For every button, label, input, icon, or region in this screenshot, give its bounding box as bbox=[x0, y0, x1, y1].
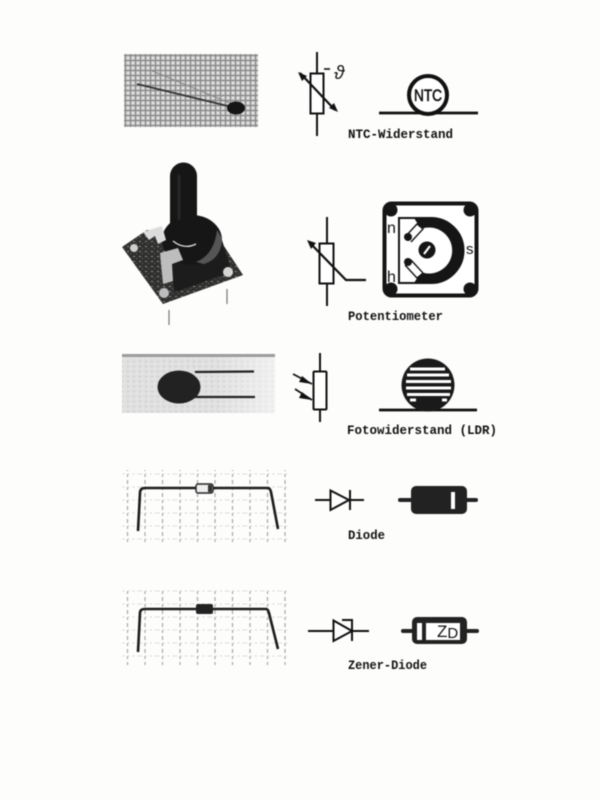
photo: diode on grid bbox=[122, 470, 290, 543]
icon: LDR package bbox=[379, 358, 477, 412]
photo: Zener diode on grid bbox=[122, 590, 290, 665]
panel: potentiometer bbox=[122, 162, 476, 325]
panel: diode bbox=[122, 470, 476, 543]
symbol: potentiometer circuit symbol bbox=[307, 217, 366, 306]
icon: potentiometer package bbox=[384, 204, 476, 296]
symbol: diode circuit symbol bbox=[315, 490, 364, 510]
icon: Zener diode package bbox=[403, 617, 477, 644]
symbol: Zener diode circuit symbol bbox=[308, 620, 369, 641]
icon: NTC package bbox=[379, 76, 478, 114]
symbol: NTC circuit symbol: ϑ bbox=[334, 63, 345, 84]
icon: potentiometer package: n bbox=[387, 220, 396, 237]
symbol: NTC circuit symbol bbox=[298, 52, 345, 136]
icon: potentiometer package: h bbox=[387, 269, 396, 286]
icon: NTC package: NTC bbox=[414, 86, 442, 105]
label: Fotowiderstand (LDR): Fotowiderstand (LDR) bbox=[347, 424, 497, 438]
panel: NTC resistor bbox=[124, 52, 478, 142]
label: NTC-Widerstand: NTC-Widerstand bbox=[348, 128, 453, 142]
panel: photoresistor bbox=[122, 353, 497, 438]
icon: Zener diode package: Z bbox=[437, 622, 447, 641]
label: Zener-Diode: Zener-Diode bbox=[348, 659, 427, 673]
photo: LDR component bbox=[122, 354, 275, 413]
panel: Zener diode bbox=[122, 590, 477, 673]
icon: diode package bbox=[400, 486, 476, 514]
label: Diode: Diode bbox=[348, 529, 385, 543]
label: Potentiometer: Potentiometer bbox=[348, 310, 443, 324]
symbol: LDR circuit symbol bbox=[293, 353, 326, 422]
icon: Zener diode package: D bbox=[447, 625, 458, 642]
photo: potentiometer component bbox=[122, 162, 243, 325]
icon: potentiometer package: s bbox=[466, 241, 474, 258]
photo: NTC resistor on grid bbox=[124, 54, 258, 127]
